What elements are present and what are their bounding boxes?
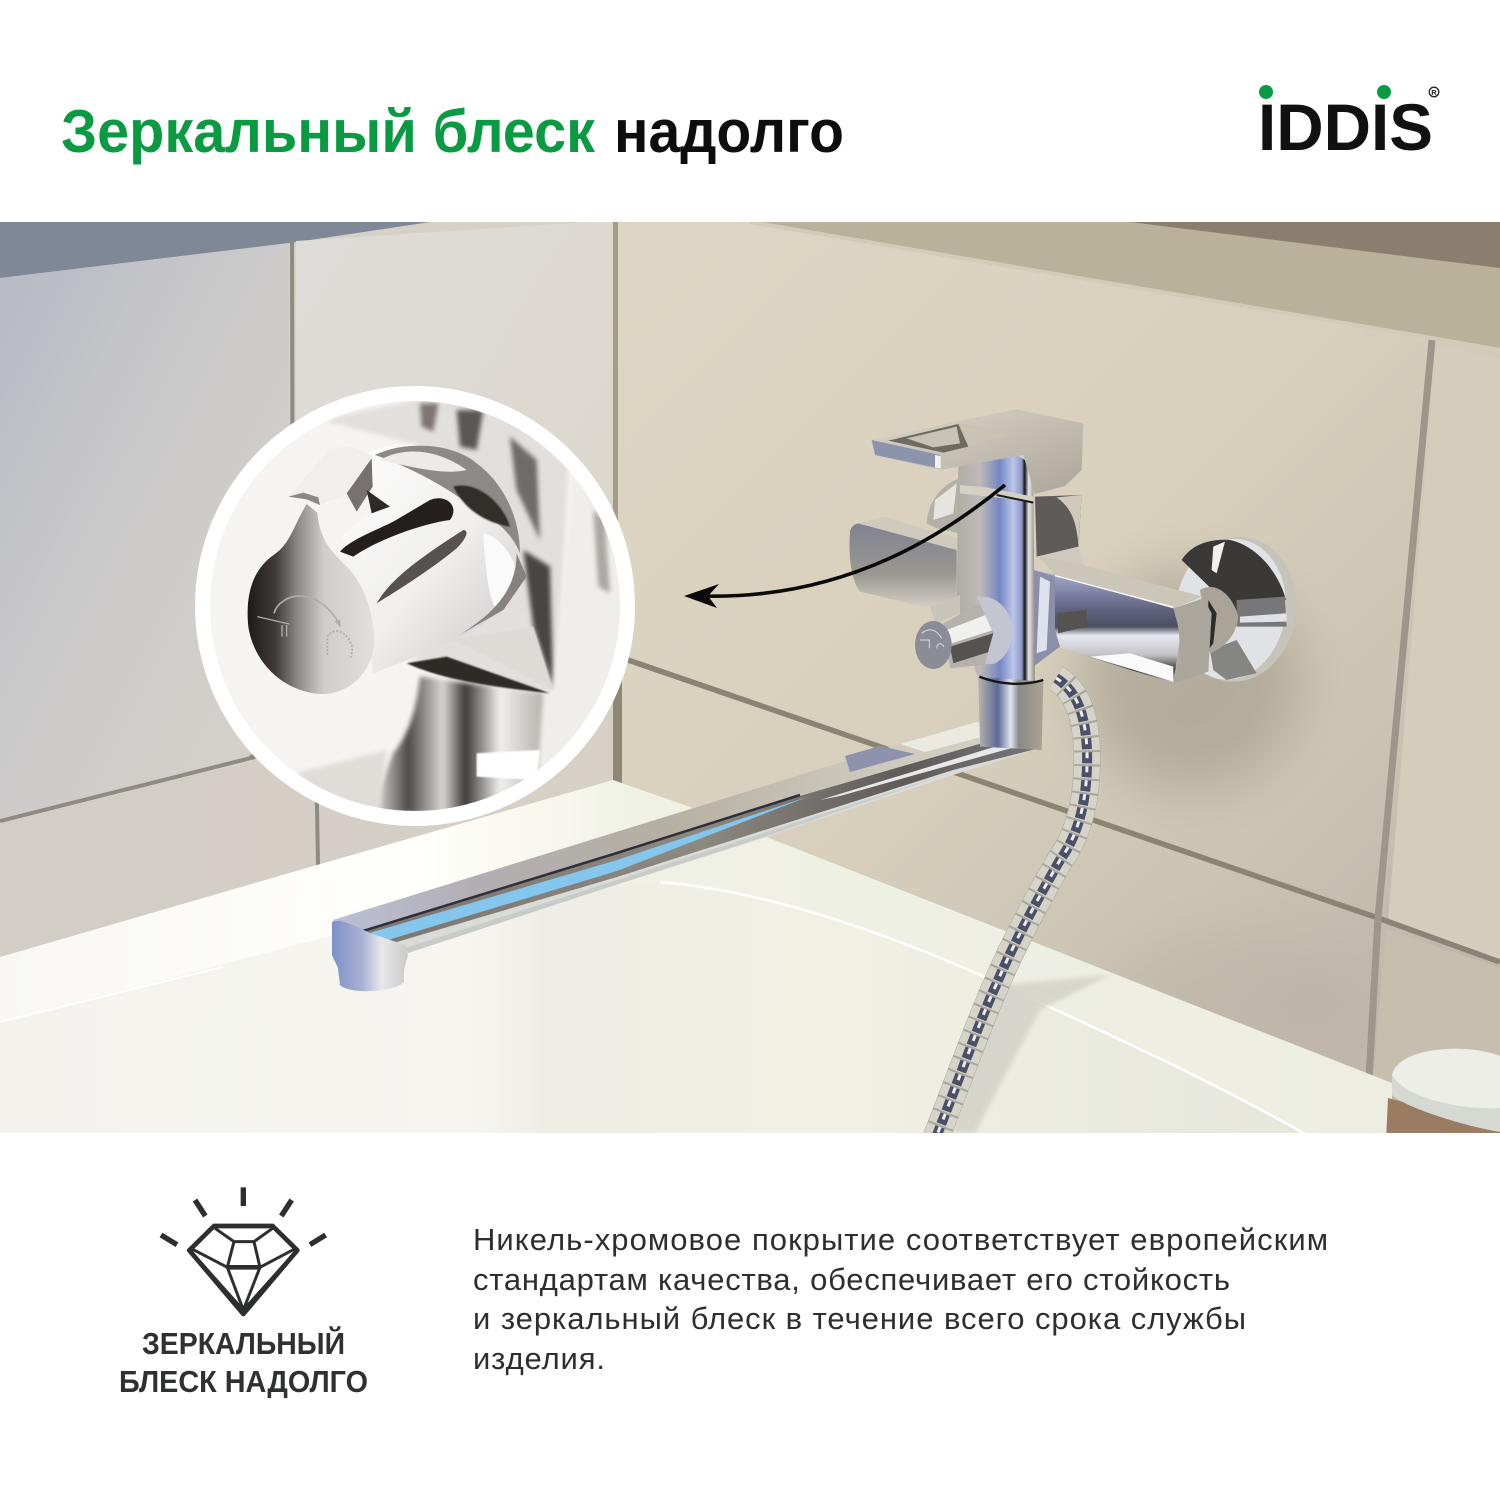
wall: right beige tiles (612, 222, 1500, 1110)
icon caption: ЗЕРКАЛЬНЫЙ (142, 1325, 345, 1361)
back arm (850, 523, 957, 608)
white ring (195, 386, 635, 826)
spout top surface (333, 720, 1017, 932)
description text: изделия. (473, 1341, 605, 1376)
spout (332, 720, 1040, 991)
wall mount disc (1175, 537, 1296, 682)
spout dark band (363, 733, 1040, 944)
stem (370, 677, 543, 813)
blurred surroundings (297, 400, 623, 813)
photo: bathroom scene (0, 222, 1500, 1140)
diverter knob (930, 595, 960, 622)
lower collar (978, 677, 1043, 750)
mixer body (850, 409, 1212, 750)
description text: Никель-хромовое покрытие соответствует европейским (473, 1222, 1328, 1257)
lever (328, 454, 372, 502)
logo: IDDIS: IDDIS (1258, 90, 1433, 164)
description text (473, 1222, 1328, 1376)
icon caption (119, 1325, 368, 1399)
description text: и зеркальный блеск в течение всего срока службы (473, 1301, 1246, 1336)
jar with lid (1386, 1049, 1500, 1140)
icon: sparkling diamond (161, 1187, 326, 1314)
logo: IDDIS: R (1431, 88, 1437, 97)
spout blue stripe (366, 796, 810, 940)
spout tip (332, 921, 408, 991)
description text: стандартам качества, обеспечивает его стойкость (473, 1262, 1230, 1297)
knob face (248, 504, 374, 694)
main arm (1033, 570, 1181, 683)
knob symbols (257, 596, 352, 658)
zoom circle: diverter close-up (190, 380, 640, 830)
cone wedge (530, 626, 552, 686)
column (957, 455, 1035, 687)
knob body (323, 445, 519, 673)
bathtub (0, 780, 1392, 1140)
wall: left grey tiles (0, 222, 625, 982)
shower hose (935, 678, 1087, 1140)
spout body (333, 747, 1034, 960)
title: надолго (614, 98, 844, 165)
title: Зеркальный блеск (61, 98, 596, 165)
arrow: from mixer to zoom circle (684, 485, 1005, 608)
icon caption: БЛЕСК НАДОЛГО (119, 1364, 368, 1399)
handle (872, 409, 1083, 494)
